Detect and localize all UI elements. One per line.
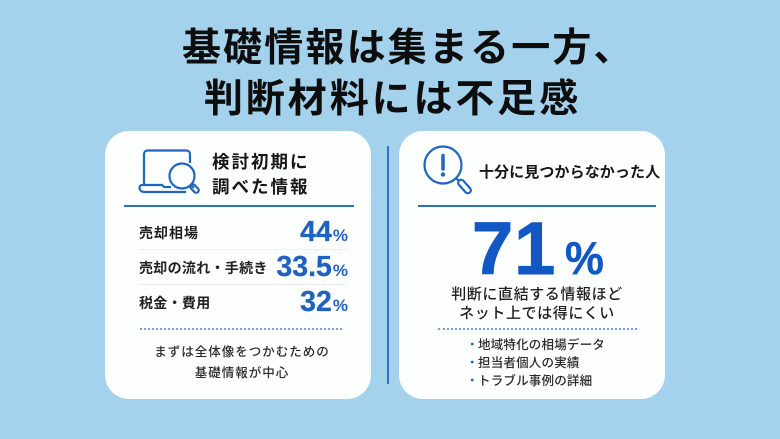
bullet list xyxy=(466,338,605,388)
note: left summary: 基礎情報が中心 xyxy=(195,366,289,380)
text: hard to find: 判断に直結する情報ほど xyxy=(451,286,623,303)
row label: taxes: 税金・費用 xyxy=(139,295,210,311)
title: 基礎情報は集まる一方、 xyxy=(182,27,635,70)
bullet: trouble cases: ・ xyxy=(466,374,479,388)
icon: laptop with magnifier xyxy=(138,149,200,194)
header rule left xyxy=(124,205,354,206)
heading: early research: 検討初期に xyxy=(212,152,310,172)
icon: exclamation magnifier xyxy=(423,145,472,194)
heading: not found: 十分に見つからなかった人 xyxy=(479,164,660,181)
divider xyxy=(387,146,388,384)
title: 判断材料には不足感 xyxy=(204,78,581,121)
panel: not found xyxy=(399,131,665,399)
bullet: regional prices: 地域特化の相場データ xyxy=(478,338,605,352)
panel: early research xyxy=(105,131,371,399)
text: hard to find xyxy=(451,286,623,322)
bullet: agent record: 担当者個人の実績 xyxy=(478,356,580,370)
heading: early research: 調べた情報 xyxy=(212,177,310,197)
note: left summary: まずは全体像をつかむための xyxy=(154,345,330,359)
big number: 71%: % xyxy=(565,232,605,284)
big number: 71% xyxy=(472,207,605,290)
row label: process: 売却の流れ・手続き xyxy=(139,260,268,276)
bullet: regional prices: ・ xyxy=(466,338,479,352)
row value: 44%: 44% xyxy=(300,216,348,248)
note: left summary xyxy=(154,345,330,380)
row value: 32%: 32% xyxy=(300,286,348,318)
row label: market price: 売却相場 xyxy=(139,225,199,241)
bullet: trouble cases: トラブル事例の詳細 xyxy=(478,374,592,388)
header rule right xyxy=(418,205,656,206)
big number: 71%: 71 xyxy=(472,207,556,290)
row value: 33.5%: 33.5% xyxy=(276,251,348,283)
heading: early research xyxy=(212,152,310,197)
title xyxy=(182,27,635,121)
bullet: agent record: ・ xyxy=(466,356,479,370)
text: hard to find: ネット上では得にくい xyxy=(459,304,615,322)
